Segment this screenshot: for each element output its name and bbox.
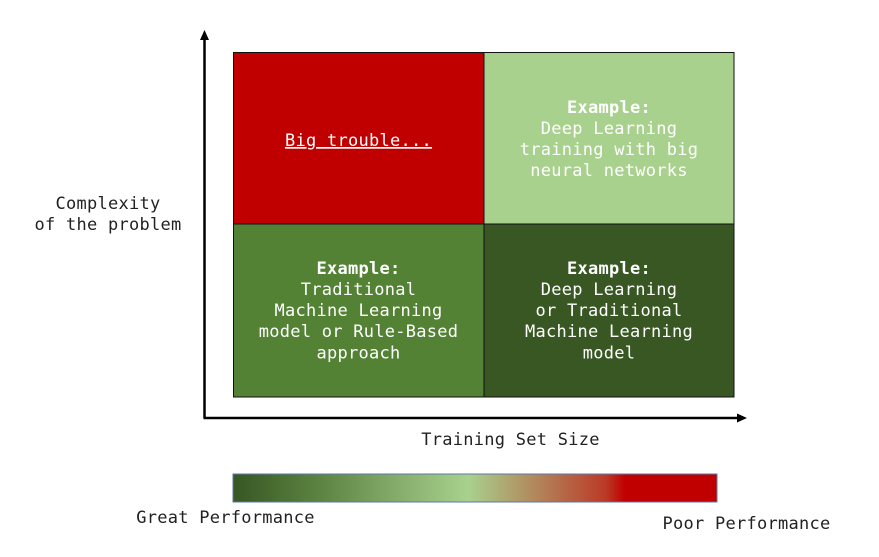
text: example deep or traditional: Machine Learning	[525, 322, 693, 342]
panel: big trouble quadrant	[234, 52, 484, 224]
text: example deep or traditional: Deep Learning	[541, 280, 677, 300]
text: example traditional machine learning: model or Rule-Based	[259, 322, 458, 342]
label: poor performance: Poor Performance	[662, 514, 831, 534]
text: example traditional machine learning: approach	[316, 344, 401, 364]
label: great performance: Great Performance	[136, 508, 315, 528]
text: example deep or traditional: Example:	[567, 259, 651, 279]
label: y axis: Complexity	[55, 194, 161, 214]
text: example traditional machine learning: Machine Learning	[274, 301, 443, 321]
text: example deep learning training: neural networks	[530, 161, 688, 181]
text: example deep or traditional	[525, 259, 693, 364]
legend: colour scale bar	[233, 474, 717, 502]
panel: deep learning big networks quadrant	[484, 52, 734, 224]
text: example deep learning training: Example:	[567, 98, 651, 118]
text: example traditional machine learning: Example:	[316, 259, 401, 279]
text: example deep or traditional: model	[583, 344, 635, 364]
text: big trouble: Big trouble...	[285, 131, 432, 151]
text: example deep learning training: training with big	[520, 140, 698, 160]
panel: traditional model quadrant	[234, 224, 484, 397]
text: example traditional machine learning: Traditional	[301, 280, 416, 300]
label: y axis	[34, 194, 182, 235]
text: example deep learning training: Deep Learning	[541, 119, 677, 139]
text: example deep learning training	[520, 98, 698, 181]
panel: deep or traditional quadrant	[484, 224, 734, 397]
text: example traditional machine learning	[259, 259, 458, 364]
arrow: horizontal axis	[204, 414, 747, 422]
label: x axis: Training Set Size	[421, 430, 600, 450]
text: example deep or traditional: or Traditional	[535, 301, 683, 321]
label: y axis: of the problem	[34, 215, 182, 235]
arrow: vertical axis	[200, 30, 209, 418]
